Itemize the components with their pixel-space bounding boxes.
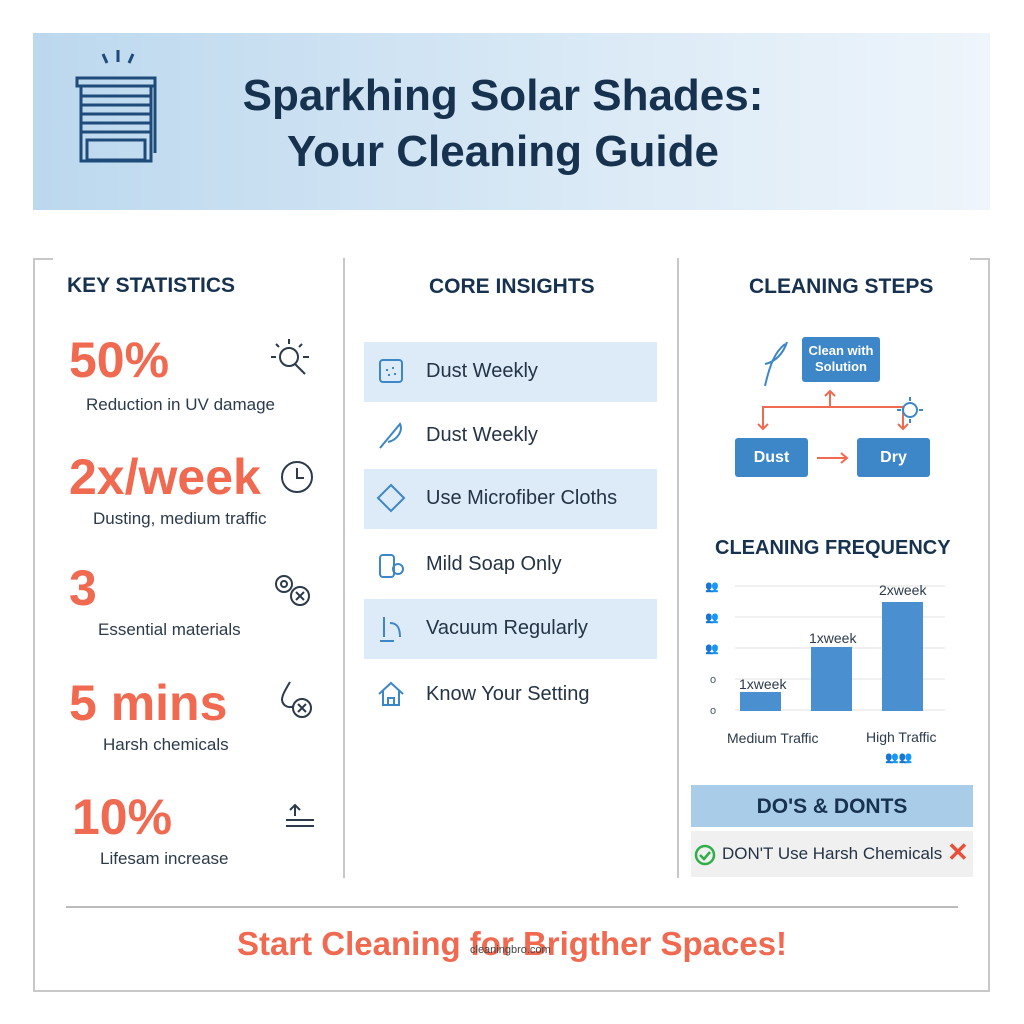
don't item [691,831,973,877]
panel: cleaning steps: Dust [754,449,789,466]
panel: key statistics [67,274,314,868]
stat 5 mins [69,675,312,754]
heading: CLEANING STEPS [749,275,933,298]
row: vacuum [364,599,657,659]
bar chart: o [710,705,716,717]
heading bar [691,785,973,827]
don't item: ✕ [947,837,969,867]
stat 2x/week: 2x/week [69,449,261,505]
bar chart: 1xweek [739,676,787,692]
row: dust weekly 2 [379,422,538,449]
stat 2x/week: Dusting, medium traffic [93,509,267,528]
header banner [33,33,990,210]
don't item: DON'T Use Harsh Chemicals [722,844,942,863]
panel: cleaning steps: Dry [880,449,907,466]
row: know setting: Know Your Setting [426,683,589,705]
row: microfiber: Use Microfiber Cloths [426,487,617,509]
title: Your Cleaning Guide [287,127,719,176]
row: dust weekly 2: Dust Weekly [426,424,538,446]
panel: cleaning frequency [705,537,951,764]
stat 5 mins: Harsh chemicals [103,735,229,754]
heading: CLEANING FREQUENCY [715,537,951,559]
bar chart: 👥👥 [885,752,913,764]
row: dust weekly 1: Dust Weekly [426,360,538,382]
footer call to action: Start Cleaning for Brigther Spaces! [237,925,787,962]
row: mild soap: Mild Soap Only [426,553,562,575]
stat 50%: 50% [69,332,169,388]
title: Sparkhing Solar Shades: [243,71,763,120]
heading: KEY STATISTICS [67,274,235,297]
bar chart: o [710,674,716,686]
bar chart [705,581,945,764]
stat 3: Essential materials [98,620,241,639]
heading bar: DO'S & DONTS [757,795,907,818]
stat 10% [72,789,314,868]
stat 10%: 10% [72,789,172,845]
bar chart: 1xweek [809,630,857,646]
stat 3: 3 [69,560,97,616]
row: mild soap [379,553,562,578]
bar chart: 2xweek [879,582,927,598]
stat 3 [69,560,310,639]
bar chart: Medium Traffic [727,730,819,746]
row: dust weekly 1 [364,342,657,402]
icon: window shade [76,50,156,162]
stat 10%: Lifesam increase [100,849,229,868]
bar chart: 👥 [705,643,719,655]
frame [33,258,990,992]
stat 5 mins: 5 mins [69,675,227,731]
bar chart: 👥 [705,581,719,593]
title [243,71,763,176]
row: microfiber [364,469,657,529]
row: vacuum: Vacuum Regularly [426,617,588,639]
heading: CORE INSIGHTS [429,275,595,298]
row: know setting [378,682,589,706]
flow diagram [757,342,923,464]
panel: cleaning steps [735,275,933,477]
panel: cleaning steps: Clean with Solution [808,343,874,374]
stat 50%: Reduction in UV damage [86,395,275,414]
watermark: cleaningbro.com [470,944,551,956]
stat 2x/week [69,449,313,528]
stat 50% [69,332,309,414]
panel: do's and don'ts [691,785,973,877]
bar chart: 👥 [705,612,719,624]
bar chart: High Traffic [866,729,937,745]
